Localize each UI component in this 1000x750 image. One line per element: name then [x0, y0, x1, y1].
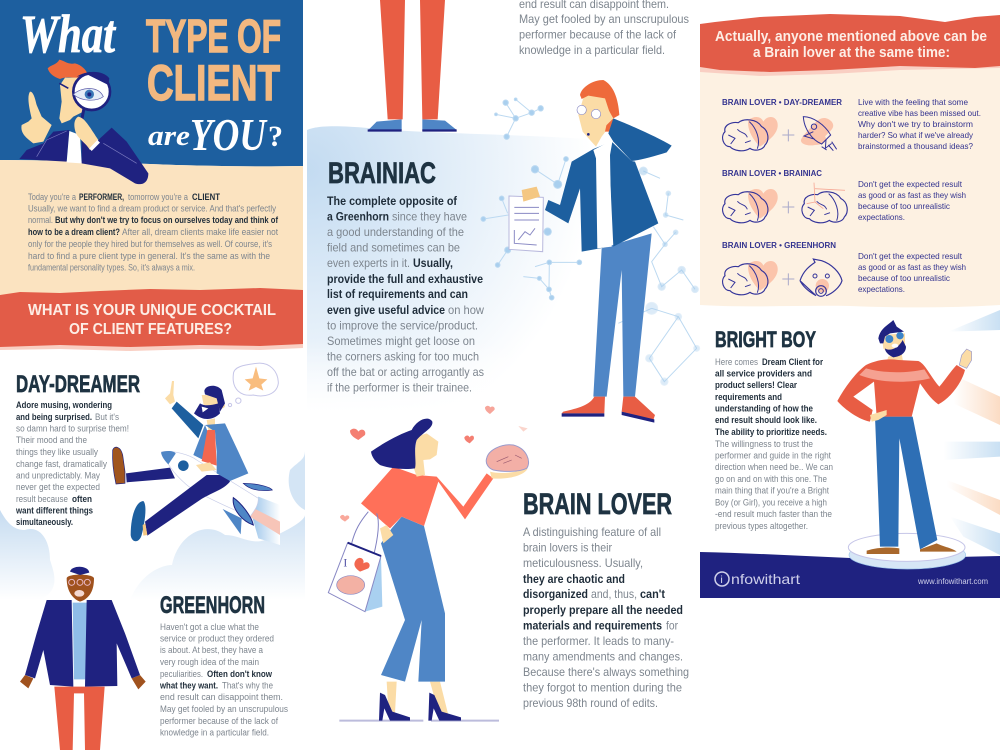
illustration: brain lover woman — [328, 406, 529, 721]
intro text: normal. — [28, 215, 53, 225]
illustration: day-dreamer on rocket — [113, 363, 280, 545]
intro text: PERFORMER, — [79, 192, 124, 202]
section: bright boy text: performer and guide in the right — [715, 450, 831, 460]
section: greenhorn text: GREENHORN — [160, 592, 265, 619]
section: brain lover text: Because there's always something — [523, 665, 689, 679]
text: greenhorn continued — [519, 0, 689, 57]
illustration: brainiac man — [509, 80, 672, 423]
row: brain lover + day-dreamer: creative vibe has been missed out. — [858, 108, 981, 118]
section: brainiac text: a good understanding of the — [327, 225, 464, 239]
section: day-dreamer text: Their mood and the — [16, 435, 87, 445]
illustration: brain lover woman: I — [343, 556, 347, 570]
section: bright boy text: The willingness to trust the — [715, 439, 813, 449]
light rays — [943, 310, 1000, 555]
text: greenhorn continued: May get fooled by an unscrupulous — [519, 12, 689, 26]
section: brain lover text: brain lovers is their — [523, 540, 612, 554]
section: brainiac text: off the bat or acting arrogantly as — [327, 365, 484, 379]
section: bright boy text: understanding of how the — [715, 404, 813, 414]
illustration: bright boy — [837, 320, 972, 569]
banner: cocktail question: WHAT IS YOUR UNIQUE COCKTAIL — [28, 302, 276, 319]
text: greenhorn continued: knowledge in a particular field. — [519, 43, 665, 57]
section: greenhorn text — [159, 592, 288, 738]
banner: brain lover combinations — [700, 14, 1000, 76]
panel: intro background — [0, 160, 303, 300]
section: bright boy text: Boy (or Girl), you receive a high — [715, 498, 827, 508]
intro text: After all, dream clients make life easier not — [122, 227, 278, 237]
section: brain lover text: can't — [640, 587, 665, 601]
section: day-dreamer text — [15, 371, 140, 527]
row: brain lover + brainiac: as good or as fast as they wish — [858, 190, 966, 200]
row: brain lover + greenhorn: BRAIN LOVER • GREENHORN — [722, 241, 836, 250]
footer: i — [720, 575, 723, 586]
section: day-dreamer text: simultaneously. — [16, 517, 73, 527]
intro text: only for the people they hired but for themselves as well. Of course, it's — [28, 239, 272, 249]
section: bright boy text: The ability to prioritize needs. — [715, 427, 827, 437]
section: greenhorn text: knowledge in a particular field. — [160, 728, 269, 738]
illustration: greenhorn — [20, 567, 146, 750]
row: brain lover + brainiac: because of too unrealistic — [858, 201, 951, 211]
intro text: But why don't we try to focus on ourselves today and think of — [55, 215, 279, 225]
section: day-dreamer text: things they like usually — [16, 447, 98, 457]
section: day-dreamer text: Adore musing, wondering — [16, 400, 112, 410]
text: greenhorn continued: performer because of the lack of — [519, 28, 677, 42]
section: brainiac text: if the performer is their trainee. — [327, 380, 472, 394]
section: bright boy text: -end result much faster than the — [715, 509, 832, 519]
section: greenhorn text: what they want. — [159, 680, 218, 690]
intro text: Usually, we want to find a dream product or service. And that's perfectly — [28, 204, 276, 214]
row: brain lover + brainiac: BRAIN LOVER • BRAINIAC — [722, 169, 822, 178]
section: greenhorn text: That's why the — [222, 680, 273, 690]
intro text: fundamental personality types. So, it's always a mix. — [28, 262, 195, 272]
section: brainiac text: The complete opposite of — [327, 194, 458, 208]
row: brain lover + greenhorn: Don't get the expected result — [858, 251, 963, 261]
banner: brain lover combinations: Actually, anyone mentioned above can be — [715, 29, 987, 45]
molecule network — [481, 98, 700, 385]
section: greenhorn text: May get fooled by an unscrupulous — [160, 704, 288, 714]
title — [20, 4, 283, 160]
section: brain lover text: for — [666, 618, 678, 632]
section: brainiac text: even experts in it. — [327, 256, 410, 270]
section: bright boy text: main thing that if you're a Bright — [715, 486, 829, 496]
section: brain lover text: materials and requirements — [523, 618, 662, 632]
row: brain lover + day-dreamer: brainstormed a thousand ideas? — [858, 141, 973, 151]
section: brainiac text: since they have — [392, 210, 467, 224]
section: day-dreamer text: and unpredictably. May — [16, 470, 100, 480]
row: brain lover + greenhorn: as good or as fast as they wish — [858, 262, 966, 272]
section: bright boy text: end result should look like. — [715, 415, 817, 425]
section: day-dreamer text: want different things — [15, 506, 93, 516]
panel: brainiac wash — [305, 126, 605, 413]
row: brain lover + brainiac: Don't get the expected result — [858, 179, 963, 189]
footer — [700, 552, 1000, 598]
row: brain lover + day-dreamer: harder? So what if we've already — [858, 130, 974, 140]
section: day-dreamer text: so damn hard to surprise them! — [16, 424, 129, 434]
section: bright boy text: Dream Client for — [762, 357, 823, 367]
section: brain lover text: many amendments and changes. — [523, 650, 683, 664]
banner: cocktail question — [0, 288, 303, 351]
section: brain lover text: they forgot to mention during the — [523, 680, 682, 694]
section: brainiac text — [327, 157, 484, 394]
section: brain lover text: the performer. It leads to many- — [523, 634, 674, 648]
row: brain lover + greenhorn: expectations. — [858, 284, 905, 294]
row: brain lover + brainiac: expectations. — [858, 212, 905, 222]
row: brain lover + day-dreamer: BRAIN LOVER • DAY-DREAMER — [722, 98, 842, 107]
title: are — [148, 121, 190, 152]
row: brain lover + day-dreamer: Why don't we try to brainstorm — [858, 119, 973, 129]
section: brain lover text: BRAIN LOVER — [523, 488, 672, 521]
section: brainiac text: Sometimes might get loose on — [327, 334, 475, 348]
section: brain lover text: they are chaotic and — [523, 572, 625, 586]
title: What — [20, 4, 117, 64]
section: bright boy text: all service providers and — [715, 368, 812, 378]
section: greenhorn text: performer because of the lack of — [160, 716, 278, 726]
illustration: greenhorn legs — [368, 0, 457, 132]
row: brain lover + day-dreamer — [722, 97, 981, 151]
section: brainiac text: BRAINIAC — [328, 157, 436, 190]
title: ? — [268, 120, 283, 153]
section: greenhorn text: end result can disappoint them. — [160, 692, 283, 702]
intro text: hard to find a pure client type in general. It's the same as with the — [28, 251, 270, 261]
intro text — [28, 192, 279, 272]
section: bright boy text: product sellers! Clear — [715, 380, 797, 390]
section: bright boy text: BRIGHT BOY — [715, 327, 816, 352]
illustration: man with magnifying glass — [19, 60, 148, 184]
section: greenhorn text: very rough idea of the main — [160, 657, 259, 667]
section: brainiac text: even give useful advice — [327, 303, 445, 317]
section: brainiac text: the corners asking for too much — [327, 350, 479, 364]
intro text: tomorrow you're a — [128, 192, 188, 202]
intro text: CLIENT — [192, 192, 220, 202]
section: brainiac text: field and sometimes can be — [327, 240, 460, 254]
title: TYPE OF — [146, 10, 281, 62]
intro text: Today you're a — [28, 192, 76, 202]
row: brain lover + greenhorn — [722, 241, 966, 296]
section: day-dreamer text: DAY-DREAMER — [16, 371, 140, 398]
panel: combinations background — [700, 60, 1000, 307]
section: greenhorn text: is about. At best, they have a — [160, 645, 263, 655]
banner: cocktail question: OF CLIENT FEATURES? — [69, 321, 232, 338]
section: brainiac text: Usually, — [413, 256, 453, 270]
banner: brain lover combinations: a Brain lover at the same time: — [753, 45, 950, 61]
section: greenhorn text: service or product they ordered — [160, 634, 274, 644]
section: day-dreamer text: change fast, dramatically — [16, 459, 107, 469]
row: brain lover + brainiac — [722, 169, 966, 223]
section: day-dreamer text: often — [72, 494, 92, 504]
footer: www.infowithart.com — [917, 577, 988, 586]
section: brainiac text: a Greenhorn — [327, 210, 389, 224]
section: greenhorn text: Often don't know — [207, 669, 273, 679]
section: day-dreamer text: and being surprised. — [16, 412, 92, 422]
section: brainiac text: to improve the service/product. — [327, 318, 478, 332]
title: CLIENT — [147, 55, 280, 111]
section: bright boy text: direction when need be.. We can — [715, 462, 833, 472]
title: YOU — [190, 109, 268, 160]
section: brain lover text: disorganized — [523, 587, 588, 601]
section: greenhorn text: peculiarities. — [160, 669, 203, 679]
section: bright boy text: go on and on with this one. The — [715, 474, 827, 484]
section: brain lover text: and, thus, — [591, 587, 637, 601]
section: brain lover text — [523, 488, 689, 710]
section: bright boy text — [715, 327, 833, 531]
intro text: how to be a dream client? — [28, 227, 120, 237]
row: brain lover + day-dreamer: Live with the feeling that some — [858, 97, 968, 107]
section: greenhorn text: Haven't got a clue what the — [160, 622, 259, 632]
section: day-dreamer text: result because — [16, 494, 68, 504]
section: bright boy text: requirements and — [715, 392, 782, 402]
section: brainiac text: provide the full and exhaustive — [327, 272, 483, 286]
clouds — [0, 450, 305, 600]
section: brain lover text: A distinguishing feature of all — [523, 525, 661, 539]
footer: nfowithart — [731, 571, 800, 587]
section: bright boy text: previous types altogether. — [715, 521, 808, 531]
panel: header background — [0, 0, 303, 166]
section: bright boy text: Here comes — [715, 357, 758, 367]
row: brain lover + greenhorn: because of too unrealistic — [858, 273, 951, 283]
section: brain lover text: previous 98th round of edits. — [523, 696, 658, 710]
section: brainiac text: list of requirements and can — [327, 287, 468, 301]
section: day-dreamer text: But it's — [95, 412, 119, 422]
section: brain lover text: properly prepare all the needed — [523, 603, 683, 617]
section: brainiac text: on how — [448, 303, 484, 317]
section: brain lover text: meticulousness. Usually, — [523, 556, 643, 570]
section: day-dreamer text: never get the expected — [16, 482, 100, 492]
